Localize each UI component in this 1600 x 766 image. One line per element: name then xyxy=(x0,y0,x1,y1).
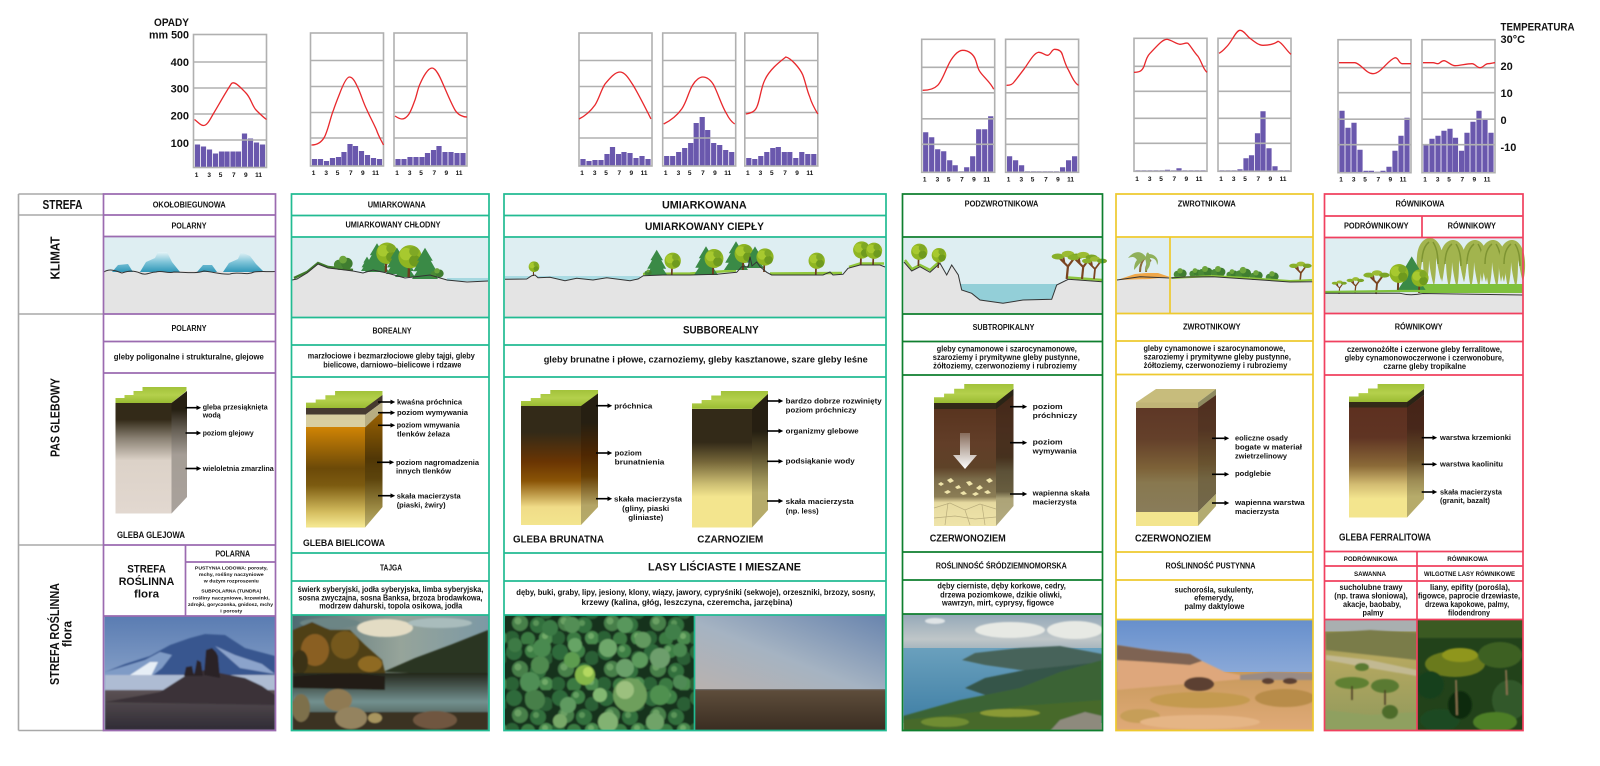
soil labels: gleba bielicowa: poziom wmywania xyxy=(397,421,460,430)
soil labels: czarnoziem: (np. less) xyxy=(786,506,819,515)
photo: steppe horizon xyxy=(695,615,886,730)
chart: climate diagram 4: 11 xyxy=(641,170,648,177)
chart: climate diagram 5: 11 xyxy=(724,170,732,177)
text: polar zone: i porosty xyxy=(220,609,243,615)
chart: climate diagram 7: 3 xyxy=(936,176,940,183)
text: subtropical zone: PODZWROTNIKOWA xyxy=(965,200,1039,209)
chart: climate diagram 10: 11 xyxy=(1280,176,1287,183)
chart: climate diagram 5: 7 xyxy=(701,170,705,177)
chart: climate diagram 3: 7 xyxy=(432,170,436,177)
chart: climate diagram 4: 5 xyxy=(604,170,608,177)
chart: climate diagram 8: 11 xyxy=(1067,176,1074,183)
soil labels: czerwonoziem subtropical: wapienna skała xyxy=(1032,489,1090,498)
panel: warm temperate zone column xyxy=(500,194,886,735)
text: warm temperate zone: UMIARKOWANA xyxy=(662,199,747,211)
text: cool temperate zone xyxy=(298,201,483,611)
icon: leaching arrow down xyxy=(953,433,977,469)
text: polar zone xyxy=(114,200,273,615)
text: warm temperate zone: LASY LIŚCIASTE I MIESZANE xyxy=(648,560,801,574)
chart: climate diagram 2: 1 xyxy=(312,170,316,177)
soil labels: czerwonoziem tropical: bogate w materiał xyxy=(1235,442,1303,451)
panel: precipitation axis label: 100 xyxy=(171,138,189,150)
soil labels: czerwonoziem subtropical: macierzysta xyxy=(1033,497,1077,506)
soil labels: czarnoziem: organizmy glebowe xyxy=(786,427,859,436)
panel: temperature axis label: TEMPERATURA xyxy=(1500,22,1575,34)
chart: climate diagram 9: 9 xyxy=(1184,176,1188,183)
chart: climate diagram 1: 7 xyxy=(232,172,236,179)
soil labels: gleba brunatna: brunatnienia xyxy=(615,458,665,467)
chart: climate diagram 12: 9 xyxy=(1472,177,1476,184)
photo: savanna xyxy=(1325,620,1417,731)
text: tropical zone: ROŚLINNOŚĆ PUSTYNNA xyxy=(1166,562,1256,571)
text: polar zone: zdrojki, goryczonka, gnidosz, mchy xyxy=(188,602,273,608)
text: cool temperate zone: świerk syberyjski, jodła syberyjska, limba syberyjska, xyxy=(298,585,483,594)
text: equatorial zone: figowce, paprocie drzewiaste, xyxy=(1418,592,1520,601)
panel: precipitation axis label: OPADY xyxy=(154,17,190,29)
soil labels: gleba ferralitowa: warstwa krzemionki xyxy=(1439,433,1511,442)
chart: climate diagram 8: 9 xyxy=(1056,176,1060,183)
panel: temperature axis label xyxy=(1500,22,1575,154)
panel: cool temperate zone column xyxy=(292,194,489,731)
text: polar zone: mchy, rośliny naczyniowe xyxy=(199,572,264,578)
chart: climate diagram 3: 3 xyxy=(408,170,412,177)
chart: climate diagram 8 xyxy=(1006,39,1079,183)
soil labels: gleba glejowa: gleba przesiąknięta xyxy=(203,402,268,412)
chart: climate diagram 1: 11 xyxy=(255,172,262,179)
chart: climate diagram 9: 3 xyxy=(1148,176,1152,183)
soil labels: gleba bielicowa: kwaśna próchnica xyxy=(397,398,463,407)
climate landscape: cool temperate xyxy=(292,238,488,317)
text: cool temperate zone: TAJGA xyxy=(380,564,402,573)
soil labels: czerwonoziem tropical: CZERWONOZIEM xyxy=(1135,533,1211,545)
chart: climate diagram 11: 1 xyxy=(1339,177,1343,184)
soil labels: czarnoziem: skała macierzysta xyxy=(786,497,855,506)
table frame: cool temperate xyxy=(292,194,489,730)
chart: climate diagram 12: 1 xyxy=(1423,177,1427,184)
chart: climate diagram 2: 5 xyxy=(336,170,340,177)
chart: climate diagram 4: 3 xyxy=(593,170,597,177)
soil labels: gleba brunatna xyxy=(513,402,683,546)
chart: climate diagram 6: 11 xyxy=(806,170,814,177)
text: equatorial zone: czerwonożółte i czerwone gleby ferralitowe, xyxy=(1347,345,1502,354)
soil labels: gleba bielicowa: tlenków żelaza xyxy=(397,430,451,439)
chart: climate diagram 10: 3 xyxy=(1232,176,1236,183)
chart: climate diagram 6 xyxy=(745,33,818,177)
text: polar zone: POLARNA xyxy=(215,550,250,559)
photo: rainforest xyxy=(1416,620,1528,732)
text: tropical zone: efemerydy, xyxy=(1194,594,1234,603)
chart: climate diagram 4 xyxy=(579,33,652,177)
text: cool temperate zone: BOREALNY xyxy=(372,327,412,336)
chart: climate diagram 9: 7 xyxy=(1172,176,1176,183)
soil labels: czerwonoziem subtropical: wymywania xyxy=(1032,446,1077,455)
chart: climate diagram 11: 3 xyxy=(1352,177,1356,184)
table frame: warm temperate xyxy=(504,194,886,730)
soil labels: gleba bielicowa: poziom nagromadzenia xyxy=(396,458,480,467)
soil labels: gleba ferralitowa: (granit, bazalt) xyxy=(1440,496,1490,505)
soil labels: czerwonoziem tropical: podglebie xyxy=(1235,469,1271,478)
panel: precipitation axis label: mm 500 xyxy=(149,30,189,42)
soil labels: gleba glejowa: poziom glejowy xyxy=(203,428,254,438)
chart: climate diagram 3 xyxy=(394,33,467,177)
panel: precipitation axis label: 400 xyxy=(171,57,189,69)
chart: climate diagram 5: 9 xyxy=(713,170,717,177)
text: cool temperate zone: sosna zwyczajna, sosna Banksa, brzoza brodawkowa, xyxy=(298,593,482,602)
soil labels: gleba brunatna: poziom xyxy=(615,449,642,458)
text: polar zone: POLARNY xyxy=(172,324,207,333)
soil labels: czerwonoziem tropical xyxy=(1135,433,1306,545)
text: tropical zone xyxy=(1143,199,1291,611)
table frame: polar xyxy=(104,194,276,730)
chart: climate diagram 1: 1 xyxy=(195,172,199,179)
soil labels: gleba bielicowa: (piaski, żwiry) xyxy=(397,500,446,509)
panel: row headers: STREFA xyxy=(42,198,82,212)
text: subtropical zone: żółtoziemy, czerwonoziemy i rubroziemy xyxy=(933,361,1077,370)
soil labels: gleba bielicowa: skała macierzysta xyxy=(397,492,461,501)
chart: climate diagram 10 xyxy=(1218,30,1291,183)
chart: climate diagram 10: 7 xyxy=(1256,176,1260,183)
text: polar zone: OKOŁOBIEGUNOWA xyxy=(153,200,226,210)
text: equatorial zone: drzewa kapokowe, palmy, xyxy=(1425,600,1509,609)
soil block: czerwonoziem tropical xyxy=(1136,389,1216,526)
soil block: gleba brunatna xyxy=(521,390,598,525)
climate landscape: tropical xyxy=(1117,238,1313,314)
panel: temperature axis label: 0 xyxy=(1500,115,1507,127)
text: equatorial zone: sucholubne trawy xyxy=(1340,583,1403,592)
text: polar zone: flora xyxy=(134,589,160,601)
soil labels: gleba glejowa: GLEBA GLEJOWA xyxy=(117,530,185,541)
soil labels: gleba bielicowa: innych tlenków xyxy=(396,467,451,476)
soil labels: gleba glejowa xyxy=(117,402,274,541)
text: equatorial zone: RÓWNIKOWY xyxy=(1448,222,1497,231)
panel: precipitation axis label xyxy=(149,17,190,150)
text: tropical zone: szaroziemy i prymitywne gleby pustynne, xyxy=(1144,352,1291,361)
panel: row headers: flora xyxy=(60,620,74,647)
climate landscape: polar xyxy=(104,237,275,314)
soil labels: czerwonoziem subtropical: CZERWONOZIEM xyxy=(930,533,1006,545)
chart: climate diagram 12 xyxy=(1422,40,1495,184)
soil labels: gleba brunatna: (gliny, piaski xyxy=(622,504,669,513)
chart: climate diagram 5: 3 xyxy=(677,170,681,177)
text: equatorial zone: liany, epifity (porośla), xyxy=(1430,583,1510,592)
soil labels: gleba bielicowa: poziom wymywania xyxy=(397,408,469,417)
text: subtropical zone: dęby cierniste, dęby korkowe, cedry, xyxy=(937,582,1066,591)
text: tropical zone: ZWROTNIKOWY xyxy=(1183,322,1241,331)
soil block: gleba glejowa xyxy=(116,387,187,514)
soil labels: gleba ferralitowa: warstwa kaolinitu xyxy=(1439,460,1503,469)
chart: climate diagram 12: 3 xyxy=(1436,177,1440,184)
icon: desert palms xyxy=(1128,252,1158,272)
panel: tropical zone column xyxy=(1116,194,1315,730)
soil labels: gleba brunatna: skała macierzysta xyxy=(614,495,683,504)
text: subtropical zone: gleby cynamonowe i szarocynamonowe, xyxy=(937,344,1077,353)
chart: climate diagram 6: 3 xyxy=(759,170,763,177)
chart: climate diagram 5 xyxy=(663,33,736,177)
chart: climate diagram 2 xyxy=(310,33,384,177)
panel: row headers: PAS GLEBOWY xyxy=(48,377,62,457)
soil labels: gleba ferralitowa: skała macierzysta xyxy=(1440,487,1503,496)
chart: climate diagram 7 xyxy=(922,39,995,183)
text: equatorial zone: WILGOTNE LASY RÓWNIKOWE xyxy=(1424,569,1516,578)
chart: climate diagram 8: 1 xyxy=(1007,176,1011,183)
chart: climate diagram 9 xyxy=(1134,38,1207,183)
panel: row headers: STREFA ROŚLINNA xyxy=(47,583,62,685)
chart: climate diagram 5: 5 xyxy=(688,170,692,177)
text: warm temperate zone: dęby, buki, graby, lipy, jesiony, klony, wiązy, jawory, cypryśniki (sekwoje), orzeszniki, brzozy, sosny, xyxy=(516,588,875,597)
text: subtropical zone: wawrzyn, mirt, cyprysy, figowce xyxy=(941,599,1055,608)
chart: climate diagram 1: 3 xyxy=(207,172,211,179)
chart: climate diagram 1: 5 xyxy=(219,172,223,179)
text: equatorial zone: RÓWNIKOWA xyxy=(1396,200,1445,209)
text: subtropical zone xyxy=(933,200,1080,608)
chart: climate diagram 11: 5 xyxy=(1363,177,1367,184)
soil labels: czerwonoziem subtropical: próchniczy xyxy=(1033,411,1078,420)
text: polar zone: ROŚLINNA xyxy=(119,575,174,588)
text: equatorial zone: (np. trawa słoniowa), xyxy=(1334,592,1408,601)
panel: row headers xyxy=(18,194,104,730)
chart: climate diagram 9: 5 xyxy=(1159,176,1163,183)
text: cool temperate zone: modrzew dahurski, topola osikowa, jodła xyxy=(319,602,463,611)
text: equatorial zone: palmy xyxy=(1362,609,1384,618)
chart: climate diagram 8: 3 xyxy=(1019,176,1023,183)
text: polar zone: gleby poligonalne i strukturalne, glejowe xyxy=(114,353,264,362)
soil labels: czerwonoziem tropical: eoliczne osady xyxy=(1235,433,1289,442)
chart: climate diagram 1 xyxy=(194,34,266,179)
text: warm temperate zone: krzewy (kalina, głóg, leszczyna, czeremcha, jarzębina) xyxy=(582,598,793,607)
panel: row headers: KLIMAT xyxy=(48,236,62,280)
chart: climate diagram 3: 5 xyxy=(419,170,423,177)
soil labels: gleba brunatna: gliniaste) xyxy=(628,513,664,522)
text: tropical zone: gleby cynamonowe i szarocynamonowe, xyxy=(1143,344,1285,353)
climate landscape: subtropical xyxy=(904,238,1107,314)
chart: climate diagram 1: 9 xyxy=(244,172,248,179)
chart: climate diagram 12: 11 xyxy=(1484,177,1491,184)
panel: precipitation axis label: 300 xyxy=(171,84,189,96)
panel: temperature axis label: 30°C xyxy=(1500,34,1525,46)
panel: equatorial zone column xyxy=(1324,194,1528,732)
chart: climate diagram 9: 1 xyxy=(1135,176,1139,183)
text: polar zone: STREFA xyxy=(127,564,166,576)
soil labels: gleba ferralitowa: GLEBA FERRALITOWA xyxy=(1339,532,1431,544)
soil labels: czarnoziem: poziom próchniczy xyxy=(786,406,857,415)
climate landscape: warm temperate xyxy=(505,238,885,317)
chart: climate diagram 2: 9 xyxy=(361,170,365,177)
chart: climate diagram 10: 1 xyxy=(1219,176,1223,183)
soil labels: gleba bielicowa: GLEBA BIELICOWA xyxy=(303,538,385,549)
text: subtropical zone: drzewa poziomkowe, dzikie oliwki, xyxy=(940,590,1062,599)
climate landscape: equatorial xyxy=(1325,238,1525,314)
chart: climate diagram 6: 1 xyxy=(746,170,750,177)
chart: climate diagram 7: 9 xyxy=(972,176,976,183)
soil labels: czerwonoziem subtropical: poziom xyxy=(1033,402,1063,411)
text: tropical zone: palmy daktylowe xyxy=(1184,602,1245,611)
chart: climate diagram 6: 9 xyxy=(795,170,799,177)
text: tropical zone: żółtoziemy, czerwonoziemy i rubroziemy xyxy=(1144,361,1288,370)
text: warm temperate zone: gleby brunatne i płowe, czarnoziemy, gleby kasztanowe, szare gleby leśne xyxy=(544,355,868,366)
soil labels: czerwonoziem subtropical xyxy=(930,402,1090,545)
chart: climate diagram 4: 7 xyxy=(617,170,621,177)
soil labels: czerwonoziem tropical: zwietrzelinowy xyxy=(1235,451,1288,460)
table frame: equatorial xyxy=(1324,194,1523,730)
text: cool temperate zone: UMIARKOWANY CHŁODNY xyxy=(346,220,441,229)
chart: climate diagram 7: 5 xyxy=(947,176,951,183)
chart: climate diagram 6: 7 xyxy=(783,170,787,177)
text: polar zone: w dużym rozproszeniu xyxy=(203,579,259,585)
soil labels: gleba glejowa: wodą xyxy=(202,410,221,420)
panel: temperature axis label: 20 xyxy=(1500,61,1513,73)
soil block: gleba ferralitowa xyxy=(1349,384,1424,518)
text: polar zone: PUSTYNIA LODOWA: porosty, xyxy=(195,565,268,571)
text: subtropical zone: ROŚLINNOŚĆ ŚRÓDZIEMNOMORSKA xyxy=(936,562,1067,571)
chart: climate diagram 3: 1 xyxy=(395,170,399,177)
chart: climate diagram 3: 11 xyxy=(456,170,463,177)
panel: temperature axis label: 10 xyxy=(1500,88,1513,100)
chart: climate diagram 5: 1 xyxy=(664,170,668,177)
text: equatorial zone: PODRÓWNIKOWY xyxy=(1344,222,1409,231)
soil labels: gleba ferralitowa xyxy=(1339,433,1511,544)
chart: climate diagram 2: 7 xyxy=(349,170,353,177)
soil labels: czerwonoziem tropical: macierzysta xyxy=(1235,507,1280,516)
text: polar zone: rośliny naczyniowe, krzewinki, xyxy=(193,595,271,601)
soil labels: gleba brunatna: próchnica xyxy=(614,402,653,411)
soil block: czarnoziem xyxy=(692,391,768,528)
text: polar zone: SUBPOLARNA (TUNDRA) xyxy=(201,589,262,595)
photo: desert plateau xyxy=(1116,620,1315,730)
chart: climate diagram 2: 11 xyxy=(372,170,379,177)
chart: climate diagram 10: 5 xyxy=(1243,176,1247,183)
text: cool temperate zone: bielicowe, darniowo–bielicowe i rdzawe xyxy=(323,360,462,369)
chart: climate diagram 12: 5 xyxy=(1447,177,1451,184)
chart: climate diagram 11: 7 xyxy=(1376,177,1380,184)
chart: climate diagram 11: 9 xyxy=(1388,177,1392,184)
table frame: subtropical xyxy=(902,194,1102,730)
text: tropical zone: suchorośla, sukulenty, xyxy=(1174,585,1254,594)
text: equatorial zone xyxy=(1334,200,1520,618)
chart: climate diagram 7: 7 xyxy=(960,176,964,183)
photo: mediterranean coast xyxy=(903,614,1103,731)
text: warm temperate zone xyxy=(516,199,875,607)
photo: polar volcano landscape xyxy=(104,616,276,730)
text: equatorial zone: akacje, baobaby, xyxy=(1343,600,1401,609)
chart: climate diagram 7: 1 xyxy=(923,176,927,183)
chart: climate diagram 4: 1 xyxy=(580,170,584,177)
table frame: tropical xyxy=(1116,194,1313,730)
soil block: czerwonoziem subtropical xyxy=(934,384,1014,526)
text: cool temperate zone: marzłociowe i bezmarzłociowe gleby tajgi, gleby xyxy=(308,352,475,361)
text: tropical zone: ZWROTNIKOWA xyxy=(1178,199,1236,208)
chart: climate diagram 7: 11 xyxy=(983,176,991,183)
text: subtropical zone: SUBTROPIKALNY xyxy=(973,323,1035,332)
text: polar zone: POLARNY xyxy=(172,222,207,231)
photo: taiga lake xyxy=(292,615,488,731)
chart: climate diagram 10: 9 xyxy=(1268,176,1272,183)
chart: climate diagram 9: 11 xyxy=(1196,176,1203,183)
text: equatorial zone: czarne gleby tropikalne xyxy=(1383,362,1467,371)
text: equatorial zone: RÓWNIKOWY xyxy=(1395,323,1443,332)
soil labels: gleba brunatna: GLEBA BRUNATNA xyxy=(513,534,604,546)
soil labels: czarnoziem xyxy=(697,396,883,546)
panel: subtropical zone column xyxy=(902,194,1107,731)
soil labels: czarnoziem: podsiąkanie wody xyxy=(786,457,856,466)
chart: climate diagram 11: 11 xyxy=(1400,177,1407,184)
text: cool temperate zone: UMIARKOWANA xyxy=(368,201,426,210)
panel: polar zone column xyxy=(104,194,276,730)
chart: climate diagram 2: 3 xyxy=(324,170,328,177)
text: subtropical zone: szaroziemy i prymitywne gleby pustynne, xyxy=(933,353,1080,362)
soil labels: czarnoziem: CZARNOZIEM xyxy=(697,534,764,546)
chart: climate diagram 8: 7 xyxy=(1044,176,1048,183)
text: equatorial zone: filodendrony xyxy=(1448,609,1490,618)
text: equatorial zone: SAWANNA xyxy=(1354,571,1386,578)
chart: climate diagram 8: 5 xyxy=(1031,176,1035,183)
chart: climate diagram 12: 7 xyxy=(1460,177,1464,184)
text: equatorial zone: RÓWNIKOWA xyxy=(1447,554,1488,563)
panel: temperature axis label: -10 xyxy=(1500,142,1516,154)
soil labels: czarnoziem: bardzo dobrze rozwinięty xyxy=(786,396,883,405)
text: warm temperate zone: SUBBOREALNY xyxy=(683,324,759,336)
text: warm temperate zone: UMIARKOWANY CIEPŁY xyxy=(645,221,765,233)
panel: precipitation axis label: 200 xyxy=(171,110,189,122)
soil block: gleba bielicowa xyxy=(306,391,382,528)
soil labels: gleba glejowa: wieloletnia zmarzlina xyxy=(202,464,274,473)
chart: climate diagram 3: 9 xyxy=(444,170,448,177)
soil labels: czerwonoziem subtropical: poziom xyxy=(1033,438,1063,447)
chart: climate diagram 11 xyxy=(1338,40,1411,184)
chart: climate diagram 6: 5 xyxy=(770,170,774,177)
photo: deciduous forest from above xyxy=(505,616,694,730)
soil labels: gleba bielicowa xyxy=(303,398,480,549)
text: equatorial zone: PODRÓWNIKOWA xyxy=(1344,554,1398,563)
soil labels: czerwonoziem tropical: wapienna warstwa xyxy=(1234,498,1306,507)
text: equatorial zone: gleby cynamonowoczerwone i czerwonobure, xyxy=(1345,354,1504,363)
chart: climate diagram 4: 9 xyxy=(629,170,633,177)
